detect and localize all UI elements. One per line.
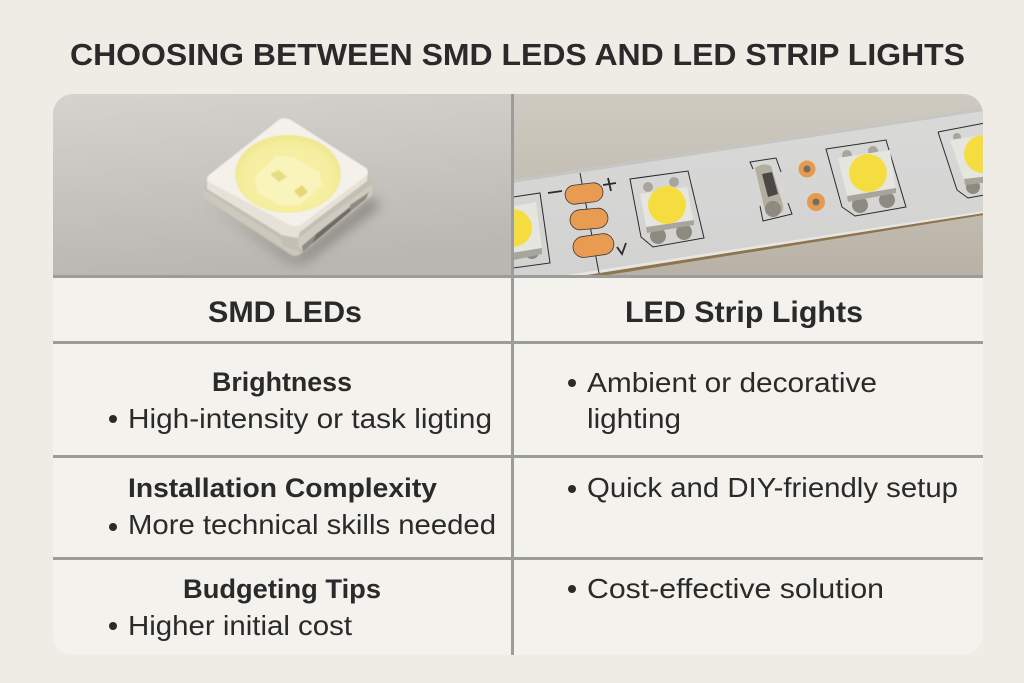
row: brightness, SMD: Brightness (212, 367, 352, 397)
LED 0 (514, 192, 551, 268)
table grid lines (53, 94, 983, 655)
row: budgeting, SMD: Higher initial cost (128, 610, 352, 641)
row: budgeting, strip: Cost-effective solution (587, 573, 884, 604)
strip board (505, 107, 990, 278)
cut line (580, 173, 599, 273)
row: brightness, SMD (109, 367, 492, 434)
column heading: LED Strip Lights: LED Strip Lights (625, 296, 863, 329)
row: budgeting, SMD (109, 574, 381, 641)
row: budgeting, SMD: Budgeting Tips (183, 574, 381, 604)
row: brightness, strip (568, 367, 877, 434)
resistor (750, 158, 792, 221)
row: installation, strip: Quick and DIY-friendly setup (587, 472, 958, 503)
contact pads (564, 182, 615, 259)
LED 3 (938, 123, 983, 198)
panel: comparison table (53, 94, 1002, 655)
LED 1 (630, 171, 704, 247)
LED 2 (826, 140, 906, 216)
photo: SMD LED chip (53, 94, 513, 278)
row: brightness, strip: Ambient or decorative (587, 367, 877, 398)
row: brightness, SMD: High-intensity or task ligting (128, 403, 492, 434)
title: CHOOSING BETWEEN SMD LEDS AND LED STRIP LIGHTS (70, 37, 965, 72)
row: installation, SMD: Installation Complexity (128, 473, 437, 503)
photo: LED strip (494, 94, 1002, 278)
polarity marks (548, 178, 626, 254)
row: installation, SMD (109, 473, 496, 540)
row: installation, SMD: More technical skills needed (128, 509, 496, 540)
row: brightness, strip: lighting (587, 403, 681, 434)
solder holes (798, 160, 825, 211)
column heading: SMD LEDs: SMD LEDs (208, 296, 362, 329)
